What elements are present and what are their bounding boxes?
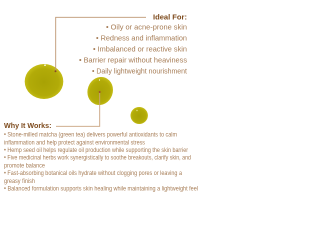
list: why it works: greasy finish — [4, 179, 35, 185]
heading: why it works: Why It Works: — [4, 121, 52, 130]
list: why it works: • Stone-milled matcha (green tea) delivers powerful antioxidants to calm — [4, 133, 177, 139]
list: ideal for: • Oily or acne-prone skin — [106, 23, 187, 32]
list: ideal for: • Barrier repair without heaviness — [79, 56, 187, 65]
icon: medium oil droplet — [84, 73, 117, 109]
list: why it works: inflammation and help protect against environmental stress — [4, 140, 145, 146]
list: why it works: promote balance — [4, 163, 46, 169]
icon: small oil droplet — [130, 107, 148, 124]
list: why it works: • Fast-absorbing botanical oils hydrate without clogging pores or leaving a — [4, 171, 183, 177]
icon: large oil droplet — [25, 64, 63, 99]
connector arrow: ideal for — [54, 17, 146, 72]
list: why it works — [4, 133, 198, 192]
list: ideal for: • Redness and inflammation — [96, 34, 187, 43]
list: ideal for: • Daily lightweight nourishment — [92, 67, 187, 76]
infographic canvas — [4, 13, 198, 192]
list: ideal for: • Imbalanced or reactive skin — [93, 45, 187, 54]
list: ideal for — [79, 23, 187, 76]
connector arrow: why it works — [56, 91, 101, 126]
heading: ideal for: Ideal For: — [153, 13, 187, 22]
